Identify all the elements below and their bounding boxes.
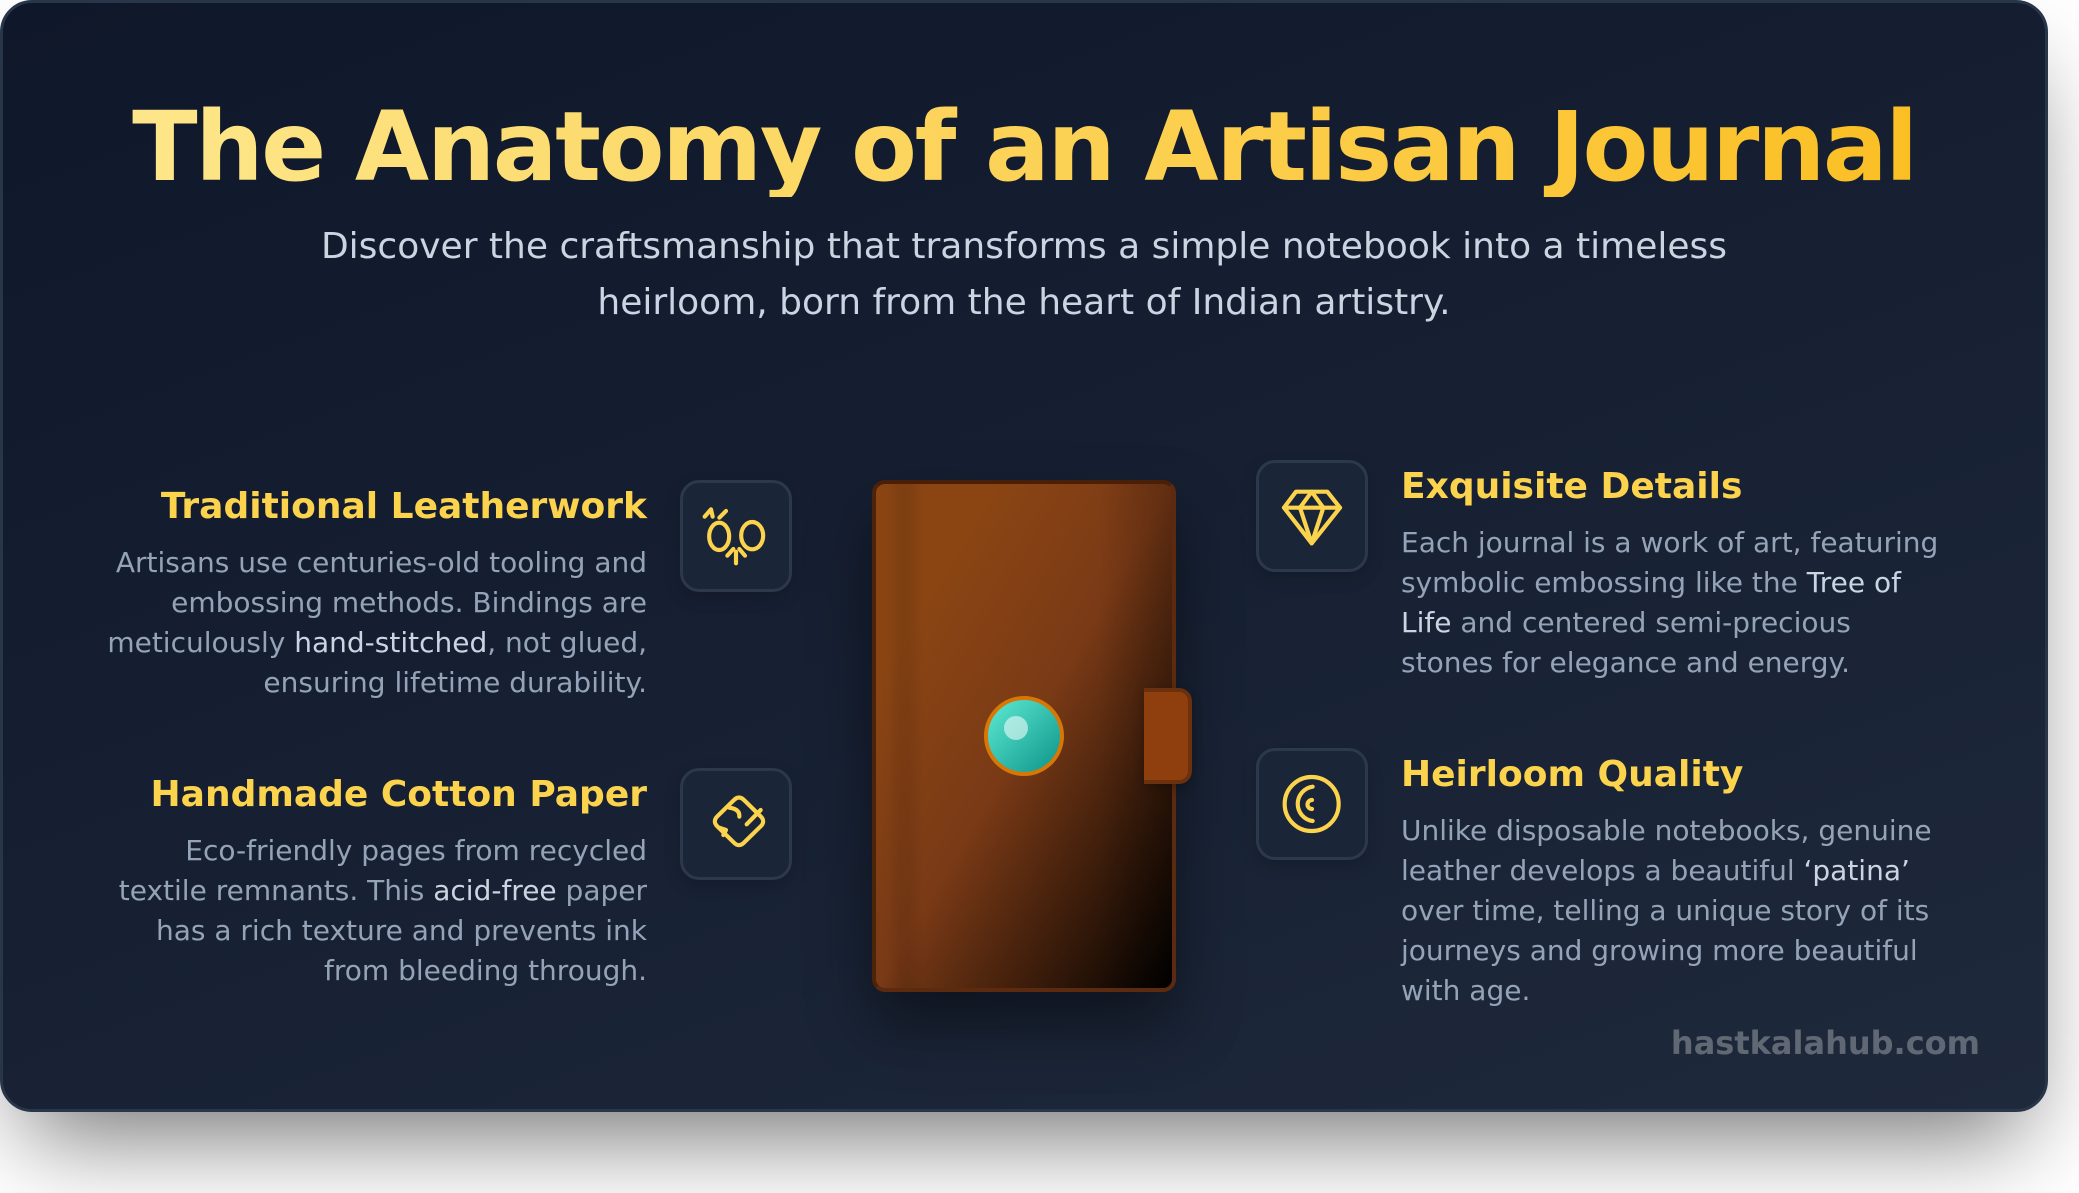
text: Handmade Cotton Paper description: Eco-friendly pages from recycled	[185, 834, 647, 867]
text: Traditional Leatherwork description	[107, 546, 647, 699]
text: Traditional Leatherwork description: embossing methods. Bindings are	[171, 586, 647, 619]
icon: diamond	[1282, 490, 1342, 546]
journal clasp	[1144, 688, 1192, 784]
text: Handmade Cotton Paper description: has a rich texture and prevents ink	[156, 914, 647, 947]
heading: Heirloom Quality: Heirloom Quality	[1401, 754, 1743, 795]
text: Traditional Leatherwork description: meticulously hand-stitched, not glued,	[107, 626, 647, 659]
text: Heirloom Quality description: with age.	[1401, 974, 1530, 1007]
gemstone	[984, 696, 1064, 776]
illustration: journal	[858, 480, 1198, 1038]
text: Exquisite Details description: Life and centered semi-precious	[1401, 606, 1851, 639]
icon: patina rings	[1282, 774, 1341, 834]
text: Heirloom Quality description: Unlike disposable notebooks, genuine	[1401, 814, 1932, 847]
text: Exquisite Details description: symbolic embossing like the Tree of	[1401, 566, 1901, 599]
journal spine	[876, 484, 924, 988]
heading: Handmade Cotton Paper: Handmade Cotton Paper	[151, 774, 647, 815]
icon box: leatherwork	[680, 480, 792, 592]
heading: Traditional Leatherwork: Traditional Leatherwork	[161, 486, 647, 527]
icon box: heirloom	[1256, 748, 1368, 860]
text: Heirloom Quality description: over time, telling a unique story of its	[1401, 894, 1929, 927]
text: Traditional Leatherwork description: Artisans use centuries-old tooling and	[116, 546, 647, 579]
text: Handmade Cotton Paper description: textile remnants. This acid-free paper	[119, 874, 647, 907]
text: Heirloom Quality description	[1400, 814, 1932, 1007]
subtitle: heirloom, born from the heart of Indian artistry.	[597, 282, 1451, 323]
text: Exquisite Details description: stones for elegance and energy.	[1401, 646, 1850, 679]
icon: leather tools	[702, 507, 766, 566]
text: Handmade Cotton Paper description: from bleeding through.	[324, 954, 647, 987]
watermark: hastkalahub.com	[1671, 1024, 1980, 1062]
subtitle	[321, 226, 1727, 323]
text: Exquisite Details description: Each journal is a work of art, featuring	[1401, 526, 1938, 559]
subtitle: Discover the craftsmanship that transforms a simple notebook into a timeless	[321, 226, 1727, 267]
text: Heirloom Quality description: leather develops a beautiful ‘patina’	[1401, 854, 1910, 887]
journal cover	[872, 480, 1176, 992]
gem highlight	[1004, 716, 1028, 740]
text: Exquisite Details description	[1401, 526, 1938, 679]
icon box: paper	[680, 768, 792, 880]
heading: Exquisite Details: Exquisite Details	[1401, 466, 1742, 507]
icon: paper sheet	[712, 795, 766, 848]
text: Traditional Leatherwork description: ensuring lifetime durability.	[263, 666, 647, 699]
icon box: details	[1256, 460, 1368, 572]
text: Heirloom Quality description: journeys and growing more beautiful	[1401, 934, 1918, 967]
title: The Anatomy of an Artisan Journal	[132, 91, 1916, 203]
text: Handmade Cotton Paper description	[119, 834, 647, 987]
